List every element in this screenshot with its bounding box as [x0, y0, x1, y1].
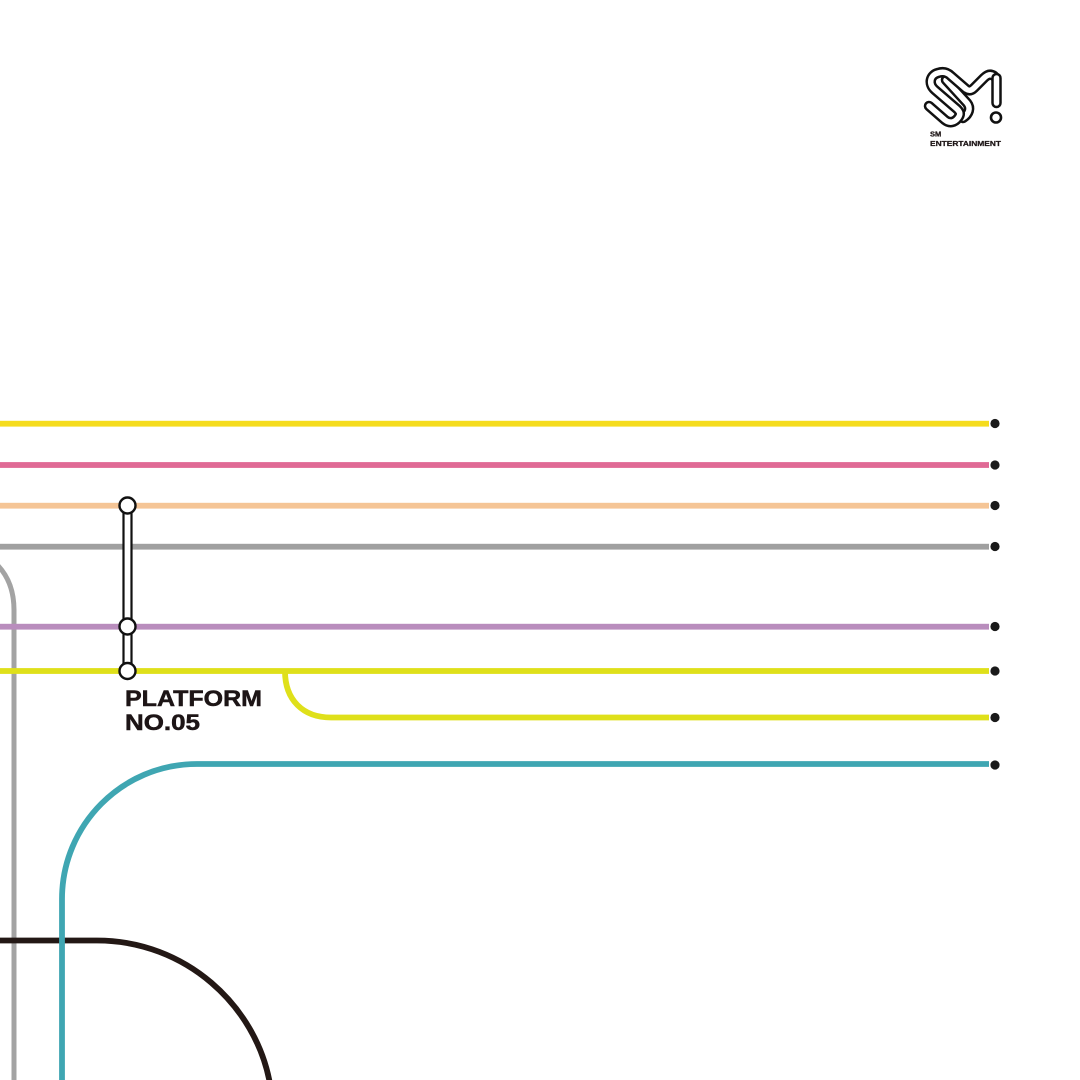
line: yellow — [0, 421, 989, 427]
line: purple — [0, 624, 989, 630]
line: lime — [0, 668, 989, 674]
line: lime branch — [285, 671, 989, 718]
line: gray curve down left side — [0, 560, 14, 1080]
line: pink — [0, 462, 989, 468]
platform label — [125, 686, 262, 735]
terminal dots — [990, 419, 1000, 770]
logo: SM Entertainment — [929, 72, 1001, 148]
line: teal curve — [62, 764, 989, 1080]
line: gray — [0, 544, 989, 550]
logo: SM Entertainment: ENTERTAINMENT — [930, 139, 1001, 148]
platform label: NO.05 — [125, 710, 200, 735]
platform interchange connector — [120, 498, 136, 679]
line: peach — [0, 503, 989, 509]
platform label: PLATFORM — [125, 686, 262, 711]
logo: SM Entertainment: SM — [930, 130, 941, 138]
line: black curve — [0, 940, 270, 1080]
